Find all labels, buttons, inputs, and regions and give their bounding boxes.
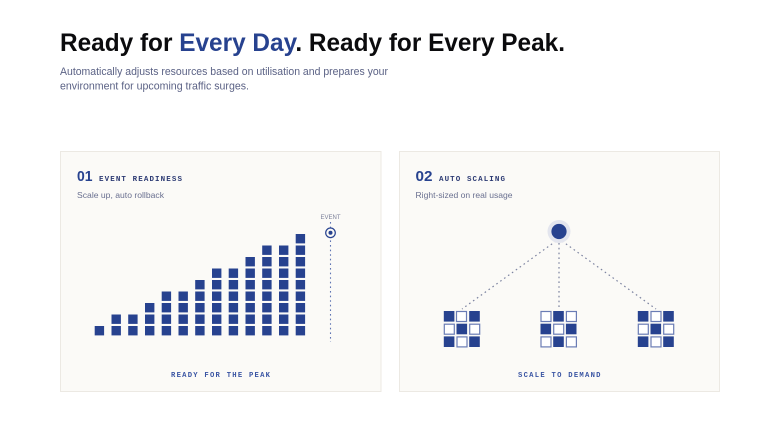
panel description: Scale up, auto rollback xyxy=(77,190,165,200)
title: Ready for Every Day. Ready for Every Peak. xyxy=(60,29,565,57)
panel caption: READY FOR THE PEAK xyxy=(171,372,271,380)
panel: event readiness xyxy=(60,152,381,392)
panel heading: AUTO SCALING xyxy=(439,176,505,184)
subtitle: environment for upcoming traffic surges. xyxy=(60,80,249,92)
subtitle: Automatically adjusts resources based on utilisation and prepares your xyxy=(60,66,388,78)
instance grid left xyxy=(444,311,480,347)
connector lines xyxy=(462,241,656,309)
panel number 02: 02 xyxy=(416,169,432,185)
panel description: Right-sized on real usage xyxy=(416,190,513,200)
bar chart xyxy=(95,234,305,335)
instance grid middle xyxy=(540,311,576,347)
source node xyxy=(548,220,570,243)
panel number 01: 01 xyxy=(77,169,92,185)
panel: auto scaling xyxy=(400,152,720,392)
panel caption: SCALE TO DEMAND xyxy=(518,372,601,380)
panel heading: EVENT READINESS xyxy=(99,176,182,184)
event marker xyxy=(320,215,341,342)
event marker: EVENT xyxy=(320,215,341,221)
subtitle xyxy=(60,66,388,92)
instance grid right xyxy=(638,311,674,347)
